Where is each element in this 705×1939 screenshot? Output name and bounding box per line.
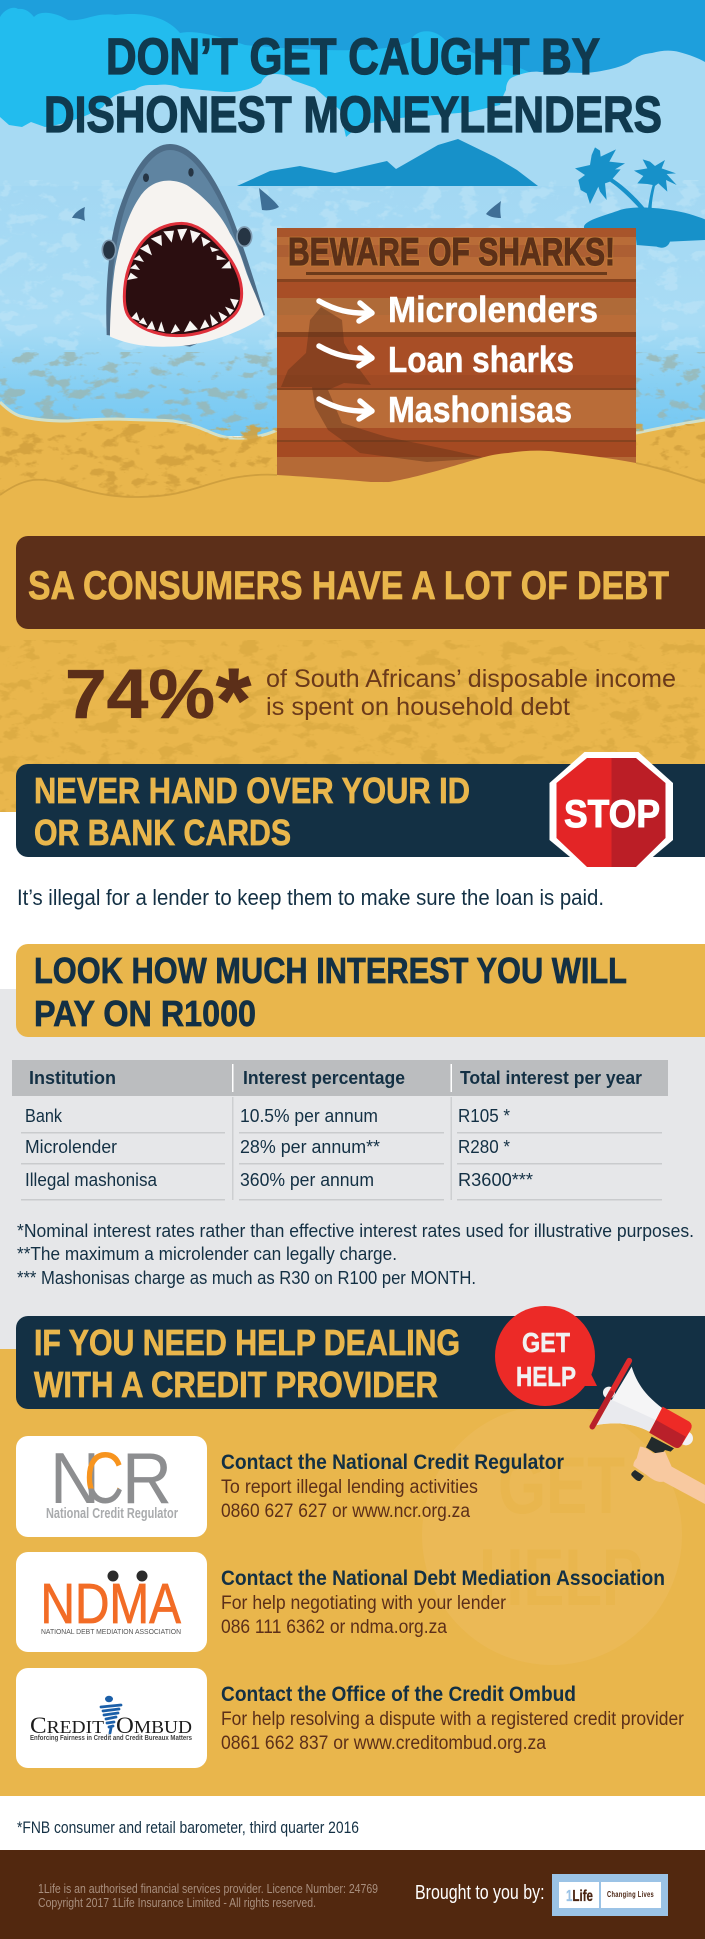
card: Credit Ombud logo: Enforcing Fairness in Credit and Credit Bureaux Matters [30,1733,192,1742]
contact: National Debt Mediation Association: Contact the National Debt Mediation Association [221,1567,665,1590]
palm tree 2 [634,159,677,209]
card: Credit Ombud logo: CREDIT [30,1713,104,1738]
text: table footnotes: **The maximum a microlender can legally charge. [17,1244,397,1264]
watermark: get help bubble: GET [498,1441,625,1531]
banner heading: WITH A CREDIT PROVIDER [34,1364,438,1405]
plank 3 [277,337,636,388]
table row: bank: Bank [25,1106,63,1126]
shark mouth [124,223,242,336]
island [584,207,705,248]
panel: hero beach scene [0,0,705,812]
contact: National Credit Regulator: 0860 627 627 or www.ncr.org.za [221,1501,470,1522]
contact: National Credit Regulator [221,1451,564,1522]
light clouds [0,51,705,200]
tail shadow [281,307,486,462]
banner heading: NEVER HAND OVER YOUR ID [34,770,470,811]
table header: Interest percentage [243,1068,405,1088]
statistic caption [266,665,676,721]
banner shape [16,536,705,629]
table row: microlender: 28% per annum** [240,1137,380,1157]
sign heading: BEWARE OF SHARKS! [288,231,615,274]
banner heading: IF YOU NEED HELP DEALING [34,1322,460,1363]
sea [0,186,705,436]
card: Credit Ombud logo: OMBUD [116,1713,192,1738]
arrow 2 [319,346,372,366]
contact: National Credit Regulator: Contact the National Credit Regulator [221,1451,564,1474]
contact: Credit Ombud: Contact the Office of the Credit Ombud [221,1683,576,1706]
front sand dune [0,451,705,560]
table row: microlender [25,1137,510,1157]
banner heading [34,770,470,853]
table row: bank: 10.5% per annum [240,1106,378,1126]
panel: footer [0,1850,705,1939]
icon: shark fin left [72,207,85,221]
panel: white source section [0,1796,705,1850]
cyan clouds [0,8,540,190]
card: NCR logo: R [122,1439,172,1519]
icon: stop sign: STOP [564,793,660,836]
table row: illegal mashonisa [25,1170,533,1190]
label: Microlenders: Microlenders [388,289,598,330]
label: Mashonisas: Mashonisas [388,389,572,430]
table row: illegal mashonisa: Illegal mashonisa [25,1170,158,1190]
sand [0,402,705,812]
title [44,28,662,143]
shark eyes and nostrils [102,168,252,260]
sea sparkle texture [0,180,705,350]
sand texture panel [0,640,705,812]
panel: help banner [16,1316,705,1409]
statistic: 74 percent [65,651,676,751]
statistic caption: of South Africans’ disposable income [266,665,676,693]
card: NDMA logo: NDMA [40,1572,181,1636]
red body [649,1407,692,1448]
watermark: get help bubble: HELP [479,1533,643,1623]
card: NCR logo: C [84,1439,124,1519]
plank 4 [277,390,636,440]
sign underline [306,272,607,275]
text: table footnotes [17,1221,694,1288]
panel: sand contact section [0,1349,705,1796]
island with palm trees [575,147,705,248]
dune ridge [0,463,705,497]
plank 2 [277,282,636,332]
sky background [0,0,705,190]
table header: Institution [29,1068,116,1088]
hand and arm [633,1447,705,1504]
table row: microlender: R280 * [458,1137,510,1157]
table header: Total interest per year [460,1068,642,1088]
callout: get help bubble: GET [522,1327,570,1358]
icon: stop sign [550,752,673,869]
palm tree 1 [575,147,645,208]
table row: microlender: Microlender [25,1137,117,1157]
sand texture [0,424,705,496]
legal text: Copyright 2017 1Life Insurance Limited - All rights reserved. [38,1895,316,1910]
panel: interest banner [16,944,705,1037]
contact: Credit Ombud [221,1683,685,1754]
rim [592,1361,629,1427]
table row: bank: R105 * [458,1106,510,1126]
banner heading [34,1322,460,1405]
banner heading: PAY ON R1000 [34,993,256,1034]
shallow water texture [0,352,705,424]
table row: illegal mashonisa: 360% per annum [240,1170,374,1190]
plank 5 [277,442,636,482]
text: source note: *FNB consumer and retail barometer, third quarter 2016 [17,1818,359,1837]
label: Loan sharks: Loan sharks [388,339,574,380]
icon: shark fin middle [259,188,279,210]
contact: National Debt Mediation Association [221,1567,665,1638]
banner shape [16,764,705,857]
legal text: 1Life is an authorised financial services provider. Licence Number: 24769 [38,1881,378,1896]
watermark: get help bubble [422,1405,682,1665]
contact: National Debt Mediation Association: For help negotiating with your lender [221,1593,507,1614]
card: NCR logo: N [50,1439,100,1519]
text: table footnotes: *Nominal interest rates rather than effective interest rates used for illustrative purposes. [17,1221,694,1241]
legal text [38,1881,378,1910]
table row: bank [25,1106,510,1126]
plank 1 [277,228,636,279]
card: NDMA logo: NATIONAL DEBT MEDIATION ASSOCIATION [41,1629,181,1636]
contact: National Credit Regulator: To report illegal lending activities [221,1477,478,1498]
logo: 1Life: 1Life [566,1888,593,1905]
arrow 3 [319,399,372,419]
arrow 1 [319,301,372,321]
asterisk: * [216,651,251,751]
icon: megaphone with hand [592,1361,705,1504]
banner heading: OR BANK CARDS [34,812,291,853]
panel: white section [0,812,705,989]
big number: 74% [65,655,215,733]
card: NCR logo [16,1436,207,1537]
wooden sign [277,228,636,482]
shark back [111,150,260,340]
callout: get help bubble: HELP [516,1361,576,1392]
table row: illegal mashonisa: R3600*** [458,1170,533,1190]
mountains [237,139,538,186]
foam line [0,402,705,438]
contact: Credit Ombud: 0861 662 837 or www.creditombud.org.za [221,1733,546,1754]
cone shade [597,1399,656,1432]
table header [12,1060,668,1096]
table: interest comparison [12,1060,668,1200]
callout: get help bubble [495,1306,597,1406]
icon: shark fin right [486,201,501,218]
shark belly [110,181,264,347]
card: Credit Ombud logo [16,1668,207,1768]
card: NDMA logo [16,1552,207,1652]
red body shade [649,1420,686,1448]
panel: debt banner [16,536,705,629]
title: DON’T GET CAUGHT BY [106,28,600,85]
shark teeth [127,229,239,333]
text: table footnotes: *** Mashonisas charge as much as R30 on R100 per MONTH. [17,1268,476,1288]
contact: National Debt Mediation Association: 086 111 6362 or ndma.org.za [221,1617,447,1638]
logo: 1Life: Changing Lives [607,1890,654,1899]
sign backing [277,228,636,482]
card: NCR logo: National Credit Regulator [46,1505,178,1522]
banner heading [34,950,627,1034]
shark body [106,144,265,347]
panel: ID warning banner [16,752,705,869]
shark [102,144,265,347]
back balls [603,1387,693,1445]
cone [597,1367,663,1432]
text: illegal notice: It’s illegal for a lender to keep them to make sure the loan is paid. [17,885,604,910]
banner shape [16,944,705,1037]
logo: 1Life [552,1874,668,1916]
panel: grey table section [0,989,705,1349]
handle [631,1437,674,1481]
brought to you by: Brought to you by: [415,1882,544,1904]
statistic caption: is spent on household debt [266,693,570,721]
banner shape [16,1316,705,1409]
